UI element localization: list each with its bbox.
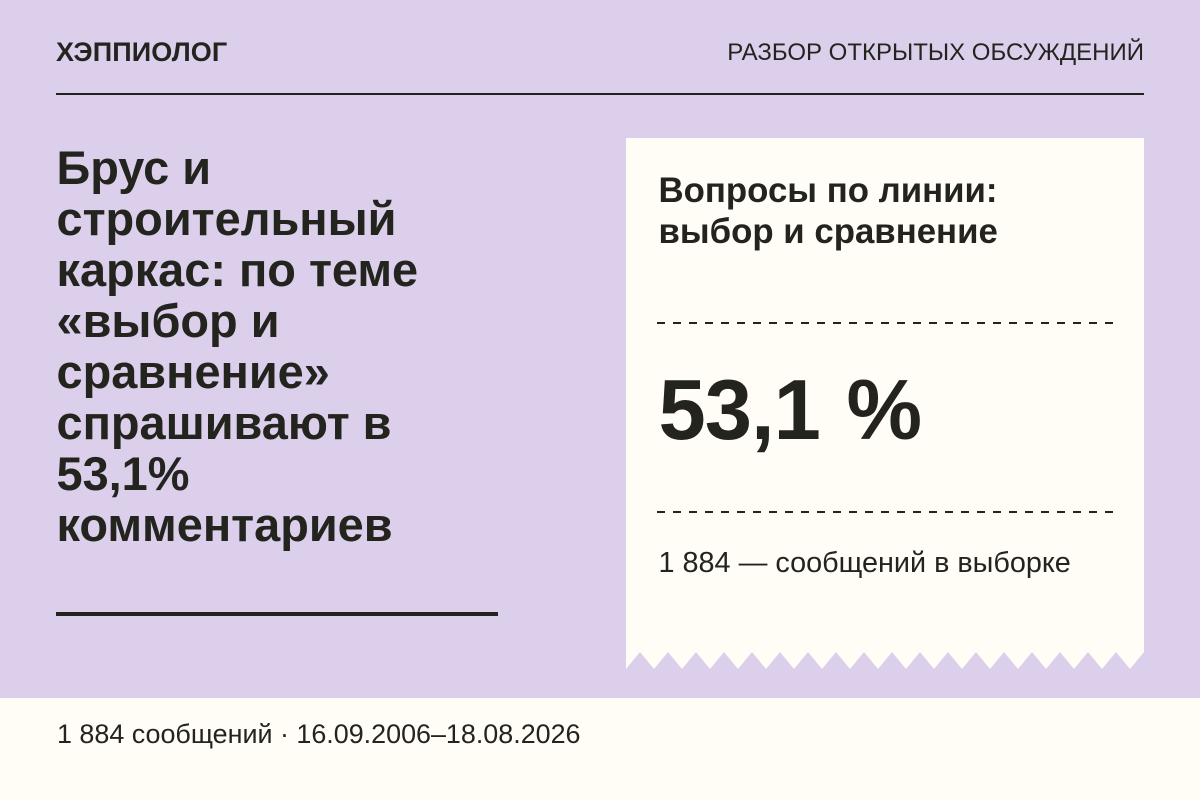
- dashed divider bottom: [657, 511, 1113, 513]
- receipt card background with torn edge: [626, 138, 1144, 669]
- main headline: Брус и: [56, 142, 211, 194]
- main headline: комментариев: [56, 499, 393, 551]
- card heading: [658, 171, 998, 251]
- brand name: ХЭППИОЛОГ: [56, 37, 227, 67]
- dashed divider top: [657, 322, 1113, 324]
- main headline: [56, 142, 418, 551]
- main headline: 53,1%: [56, 448, 189, 500]
- header rule: [56, 93, 1144, 95]
- headline underline: [56, 612, 498, 616]
- sample size note: 1 884 — сообщений в выборке: [658, 547, 1071, 579]
- main headline: строительный: [56, 193, 397, 245]
- footer band: [0, 698, 1200, 800]
- header caption: РАЗБОР ОТКРЫТЫХ ОБСУЖДЕНИЙ: [727, 39, 1144, 66]
- card heading: Вопросы по линии:: [658, 171, 998, 210]
- main headline: каркас: по теме: [56, 244, 418, 296]
- panel: receipt card: [626, 138, 1144, 669]
- big percentage: 53,1 %: [658, 363, 921, 458]
- footer text: 1 884 сообщений · 16.09.2006–18.08.2026: [57, 719, 581, 749]
- main headline: сравнение»: [56, 346, 330, 398]
- main headline: спрашивают в: [56, 397, 392, 449]
- main headline: «выбор и: [56, 295, 280, 347]
- card heading: выбор и сравнение: [658, 212, 998, 251]
